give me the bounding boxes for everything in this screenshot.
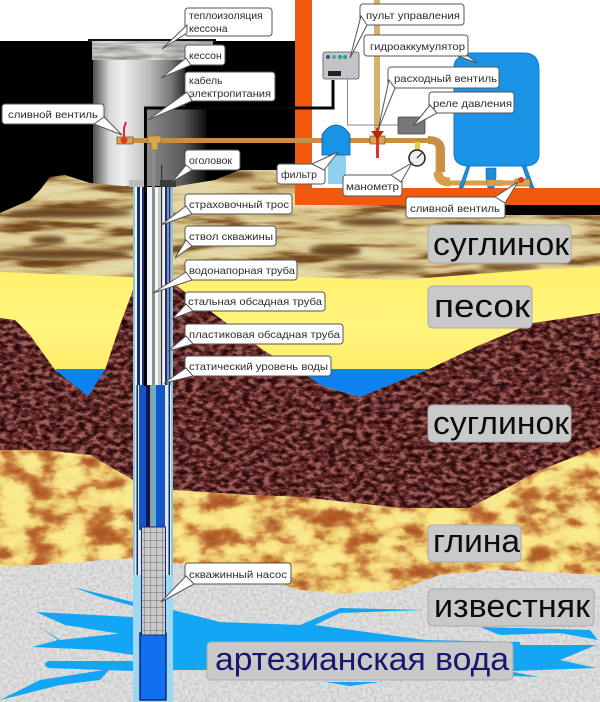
label: сливной вентиль (right) [406,182,518,218]
steel pipe shading [152,150,155,385]
safety rope [161,165,162,385]
label: кабель электропитания [148,72,275,120]
label: сливной вентиль (right): сливной вентиль [410,203,501,215]
pressure relay [398,117,425,134]
layer label: глина: глина [433,523,520,559]
label: расходный вентиль [378,67,499,130]
label: кессон [161,45,225,78]
wellbore stripes [137,187,170,385]
label: стальная обсадная труба: стальная обсадная труба [188,296,322,308]
power cable [146,80,333,386]
label: пульт управления [350,4,464,58]
manometer [409,142,425,166]
label: скважинный насос: скважинный насос [189,569,287,581]
consumption valve [370,128,385,158]
caisson lower interior [147,107,207,186]
filter cup [328,155,346,184]
label: скважинный насос [161,563,291,602]
label: сливной вентиль (left) [2,104,122,135]
label: кессон: кессон [189,50,222,62]
artesian water streaks [0,587,598,700]
outer casing above water [133,187,173,385]
label: теплоизоляция кессона: теплоизоляция [189,10,263,22]
label: пульт управления: пульт управления [366,10,460,22]
layer label: суглинок (top): суглинок [433,226,570,262]
tank body [454,53,539,166]
label: гидроаккумулятор [364,35,477,63]
label: пластиковая обсадная труба: пластиковая обсадная труба [189,329,340,341]
submersible pump [142,527,166,635]
label: реле давления [413,92,514,126]
label: манометр: манометр [346,181,399,193]
label: статический уровень воды: статический уровень воды [189,361,328,373]
water column [135,385,171,575]
caisson cylinder [93,60,185,186]
lower well bottom [140,633,166,700]
label: ствол скважины [175,226,276,258]
soil layer: dark loam [0,280,600,515]
control panel [323,52,359,79]
label: пластиковая обсадная труба [168,324,343,351]
tank legs [459,166,534,188]
label: водонапорная труба: водонапорная труба [189,265,295,277]
drain valve right [515,177,530,186]
label: оголовок: оголовок [189,155,232,167]
label: теплоизоляция кессона [162,8,272,49]
bottom pipe fitting [487,180,503,186]
label: страховочный трос [161,194,292,225]
soil layer: top loam [0,170,600,280]
hydraulic accumulator tank [454,53,539,188]
layer label: артезианская вода: артезианская вода [215,641,509,677]
open aquifer section [133,575,173,702]
label: ствол скважины: ствол скважины [189,231,273,243]
label: кабель электропитания: электропитания [189,88,271,100]
orange house wall and floor [295,0,600,205]
tee fitting [148,136,161,150]
soil layer: clay [0,445,600,600]
label: водонапорная труба [153,260,297,293]
label: реле давления: реле давления [433,98,512,110]
pipe elbow [430,140,530,183]
label: кабель электропитания: кабель [189,75,223,87]
groundwater pond left [55,369,107,396]
wellhead [129,180,176,187]
label: сливной вентиль (left): сливной вентиль [8,109,99,121]
label: страховочный трос: страховочный трос [189,199,289,211]
vertical supply pipe [374,0,380,136]
label: фильтр: фильтр [281,169,317,181]
label: теплоизоляция кессона: кессона [189,23,228,35]
soil layer: limestone [0,555,600,702]
label: стальная обсадная труба [172,292,325,319]
label: фильтр [277,152,338,184]
filter dome [322,125,350,155]
label: статический уровень воды [164,356,331,383]
groundwater pond right [290,369,430,397]
label: расходный вентиль: расходный вентиль [394,73,498,85]
layer label: суглинок (middle): суглинок [433,405,570,441]
soil layer: sand [0,267,600,400]
control wire [348,79,398,125]
layer label: известняк: известняк [434,588,591,624]
horizontal pipe [117,138,432,143]
drain valve left [117,122,133,144]
layer label: песок: песок [434,288,531,324]
water pipes [117,0,530,183]
caisson thermal insulation lid [88,39,216,60]
filter [322,125,350,184]
layer label: песок [428,286,532,328]
label: гидроаккумулятор: гидроаккумулятор [370,41,465,53]
label: манометр [343,163,412,196]
borehole well [129,150,176,702]
caisson [88,39,216,186]
label: оголовок [172,150,240,182]
